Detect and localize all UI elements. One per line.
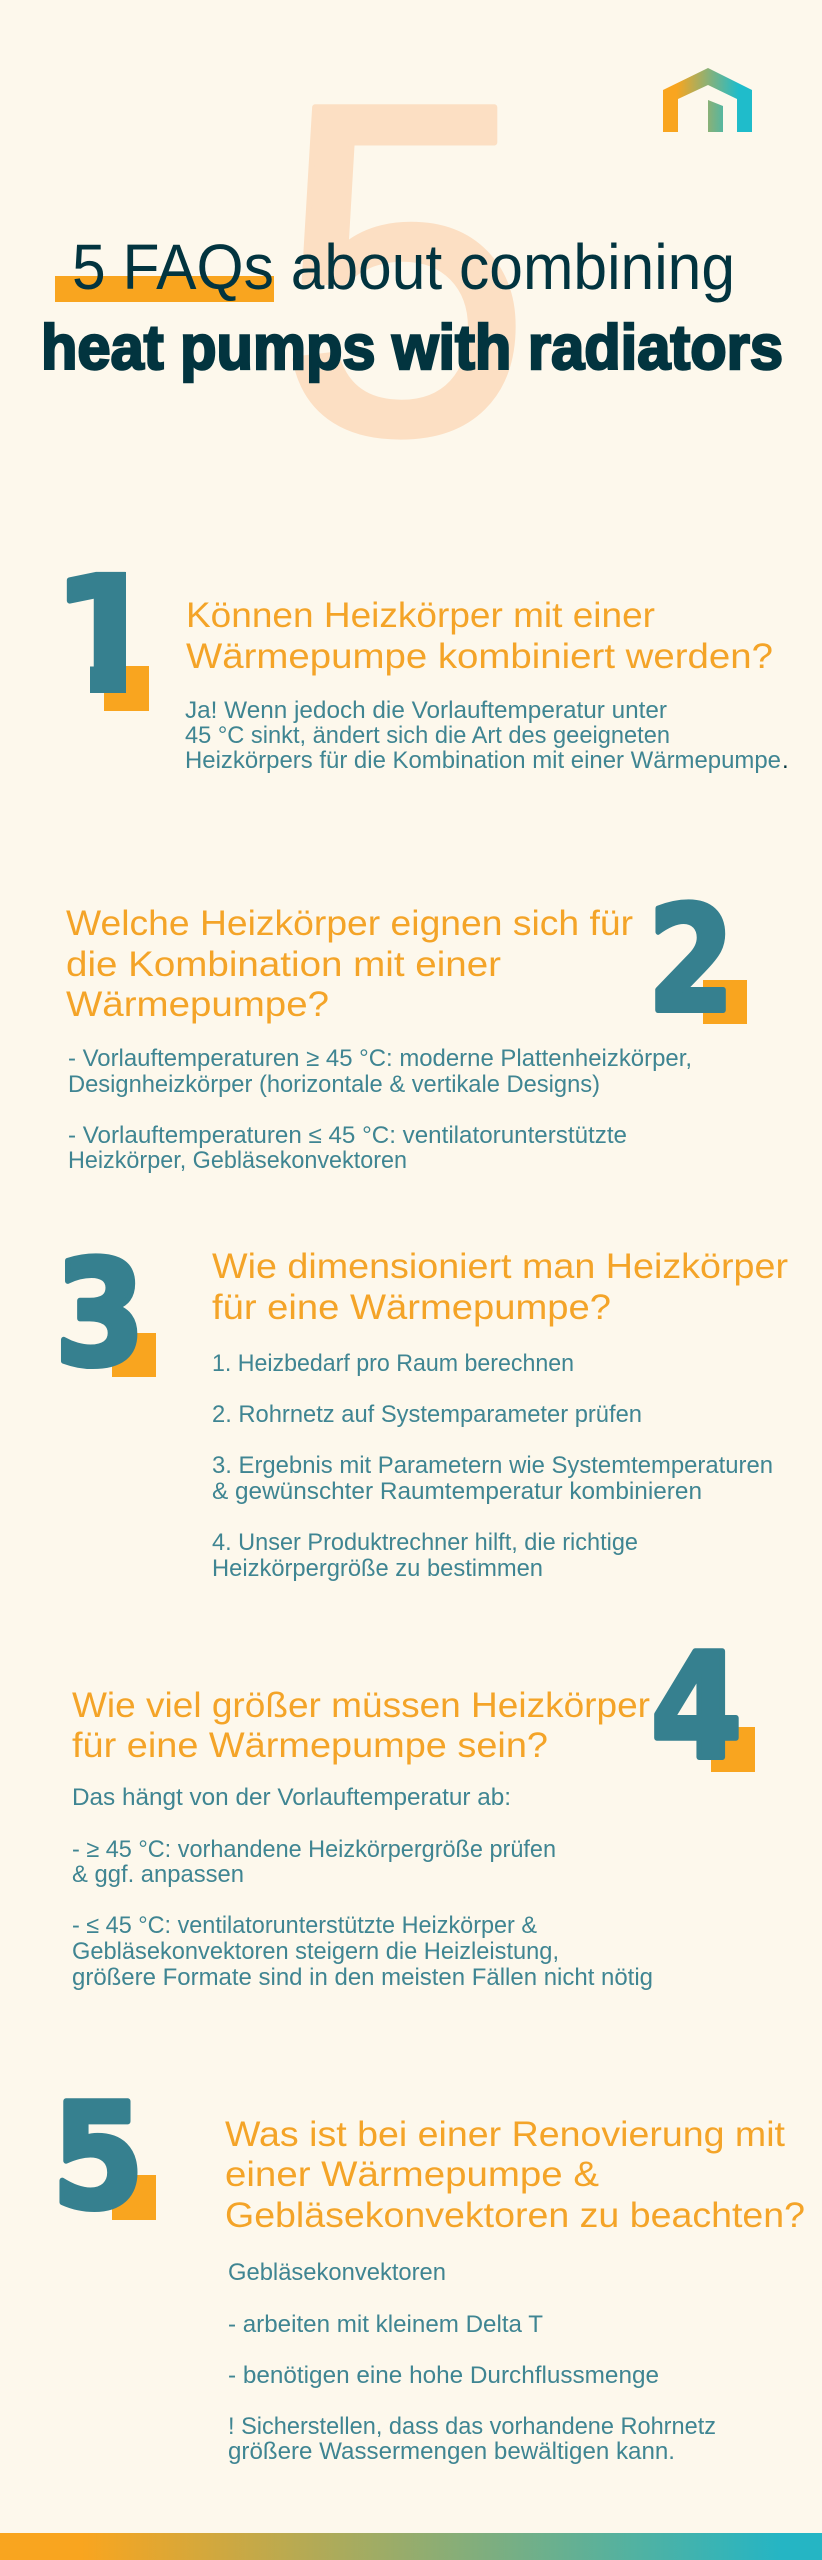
title [41,231,783,383]
body text 4: Gebläsekonvektoren steigern die Heizleistung, [72,1938,559,1965]
heading 3: Wie dimensioniert man Heizkörper [212,1247,788,1286]
body text 1: . [782,747,789,774]
number badge 2: 2 [648,876,734,1045]
heading 4: für eine Wärmepumpe sein? [72,1726,548,1765]
body text 3: & gewünschter Raumtemperatur kombinieren [212,1478,702,1505]
heading 2: Welche Heizkörper eignen sich für [66,904,633,943]
body text 1: 45 °C sinkt, ändert sich die Art des geeigneten [185,722,670,749]
body text 1 [185,697,789,774]
number badge 5: 5 [52,2073,144,2242]
panel: FAQ 4 [72,1623,755,1991]
heading 5: Was ist bei einer Renovierung mit [225,2115,785,2154]
body text 2: Designheizkörper (horizontale & vertikale Designs) [68,1071,600,1098]
body text 3: 1. Heizbedarf pro Raum berechnen [212,1350,574,1377]
body text 2: - Vorlauftemperaturen ≥ 45 °C: moderne Plattenheizkörper, [68,1045,692,1072]
footer gradient bar [0,2533,822,2560]
body text 5: ! Sicherstellen, dass das vorhandene Rohrnetz [228,2413,716,2440]
body text 3 [212,1350,773,1582]
body text 4: Das hängt von der Vorlauftemperatur ab: [72,1784,511,1811]
heading 2: die Kombination mit einer [66,945,501,984]
heading 5 [225,2115,805,2235]
body text 1: Ja! Wenn jedoch die Vorlauftemperatur unter [185,697,667,724]
panel: FAQ 2 [66,876,747,1174]
heading 5: Gebläsekonvektoren zu beachten? [225,2196,805,2235]
title: heat pumps with radiators [41,313,783,383]
number badge 1 [66,572,149,711]
panel: FAQ 3 [55,1230,788,1582]
body text 2 [68,1045,692,1174]
panel: FAQ 1 [66,572,786,773]
body text 5: Gebläsekonvektoren [228,2259,446,2286]
body text 5 [228,2259,716,2465]
body text 2: Heizkörper, Gebläsekonvektoren [68,1147,407,1174]
heading 3 [212,1247,788,1327]
body text 5: größere Wassermengen bewältigen kann. [228,2438,675,2465]
body text 2: - Vorlauftemperaturen ≤ 45 °C: ventilatorunterstützte [68,1122,627,1149]
body text 4: - ≤ 45 °C: ventilatorunterstützte Heizkörper & [72,1912,537,1939]
body text 3: Heizkörpergröße zu bestimmen [212,1555,543,1582]
number badge 1: 1 [52,544,162,728]
number badge 4: 4 [651,1623,742,1792]
body text 3: 4. Unser Produktrechner hilft, die richtige [212,1529,638,1556]
body text 5: - benötigen eine hohe Durchflussmenge [228,2362,659,2389]
heading 1 [186,596,773,676]
heading 2: Wärmepumpe? [66,985,329,1024]
heading 4: Wie viel größer müssen Heizkörper [72,1686,650,1725]
body text 3: 2. Rohrnetz auf Systemparameter prüfen [212,1401,642,1428]
panel: FAQ 5 [52,2073,805,2465]
body text 5: - arbeiten mit kleinem Delta T [228,2311,543,2338]
title: 5 FAQs about combining [72,231,735,303]
background numeral 5: 5 [277,6,532,533]
title highlight bar [55,276,274,302]
heading 2 [66,904,633,1024]
heading 3: für eine Wärmepumpe? [212,1288,611,1327]
body text 4: - ≥ 45 °C: vorhandene Heizkörpergröße prüfen [72,1836,556,1863]
icon: house logo [663,68,752,132]
body text 3: 3. Ergebnis mit Parametern wie Systemtemperaturen [212,1452,773,1479]
body text 1: Heizkörpers für die Kombination mit einer Wärmepumpe [185,747,781,774]
heading 5: einer Wärmepumpe & [225,2155,599,2194]
body text 4: größere Formate sind in den meisten Fällen nicht nötig [72,1964,653,1991]
heading 4 [72,1686,650,1765]
number badge 3: 3 [55,1230,145,1399]
heading 1: Wärmepumpe kombiniert werden? [186,637,773,676]
body text 4: & ggf. anpassen [72,1861,244,1888]
heading 1: Können Heizkörper mit einer [186,596,655,635]
body text 4 [72,1784,653,1991]
